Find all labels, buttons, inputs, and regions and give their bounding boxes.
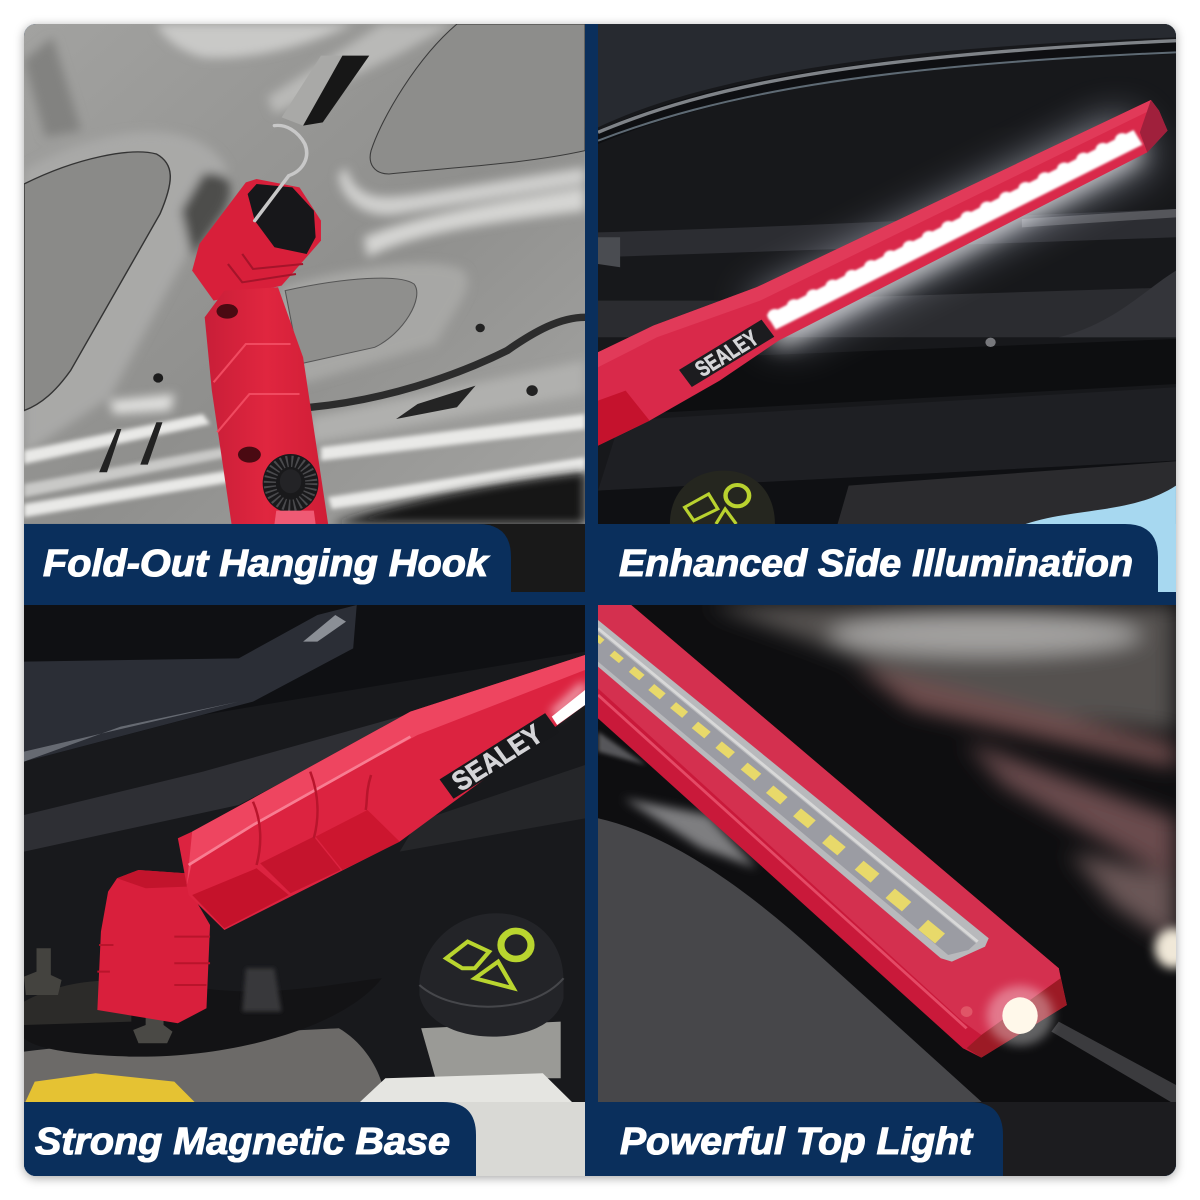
box [838, 461, 1176, 524]
corner backgrounds [430, 524, 1176, 1176]
icon: torch base [97, 870, 210, 1023]
dividers [24, 1165, 1176, 1176]
label: fold-out hanging hook: Fold-Out Hanging Hook [43, 543, 490, 585]
panel: fold-out hanging hook [24, 24, 585, 524]
panel: strong magnetic base [24, 605, 585, 1105]
label: powerful top light: Powerful Top Light [620, 1121, 973, 1163]
icon: reservoir cap [419, 913, 564, 1037]
slots [282, 56, 342, 126]
label: strong magnetic base [24, 1102, 476, 1176]
icon: hook [255, 125, 307, 221]
label: powerful top light [598, 1102, 1003, 1176]
icon: top light [987, 986, 1053, 1046]
icon: torch body [205, 287, 328, 524]
label: enhanced side illumination [598, 524, 1158, 592]
glow [768, 137, 1138, 324]
icon: torch body [594, 605, 1067, 1058]
LEDs [594, 635, 945, 944]
label: strong magnetic base: Strong Magnetic Base [35, 1121, 450, 1163]
icon: torch arm [598, 100, 1167, 446]
label: fold-out hanging hook [24, 524, 511, 592]
icon: torch head [192, 179, 321, 301]
icon: studs [24, 948, 62, 995]
icon: button [263, 454, 318, 513]
panel: powerful top light [594, 605, 1191, 1105]
cable [310, 317, 585, 407]
panel: enhanced side illumination [598, 24, 1176, 524]
icon: brand badge: SEALEY [446, 719, 549, 798]
tip [967, 978, 1067, 1058]
icon: torch handle [178, 655, 585, 930]
textured surface [598, 818, 985, 1105]
pocket panels [24, 152, 170, 411]
icon: reservoir cap [670, 482, 775, 524]
icon: brand badge: SEALEY [690, 325, 764, 381]
icon: LED strip [771, 135, 1138, 322]
label: enhanced side illumination: Enhanced Side Illumination [619, 543, 1133, 585]
glove [1026, 486, 1176, 524]
icon: lens panel [598, 620, 989, 962]
icon: brand badge [678, 318, 776, 389]
icon: brake fluid bottle [24, 1028, 385, 1105]
